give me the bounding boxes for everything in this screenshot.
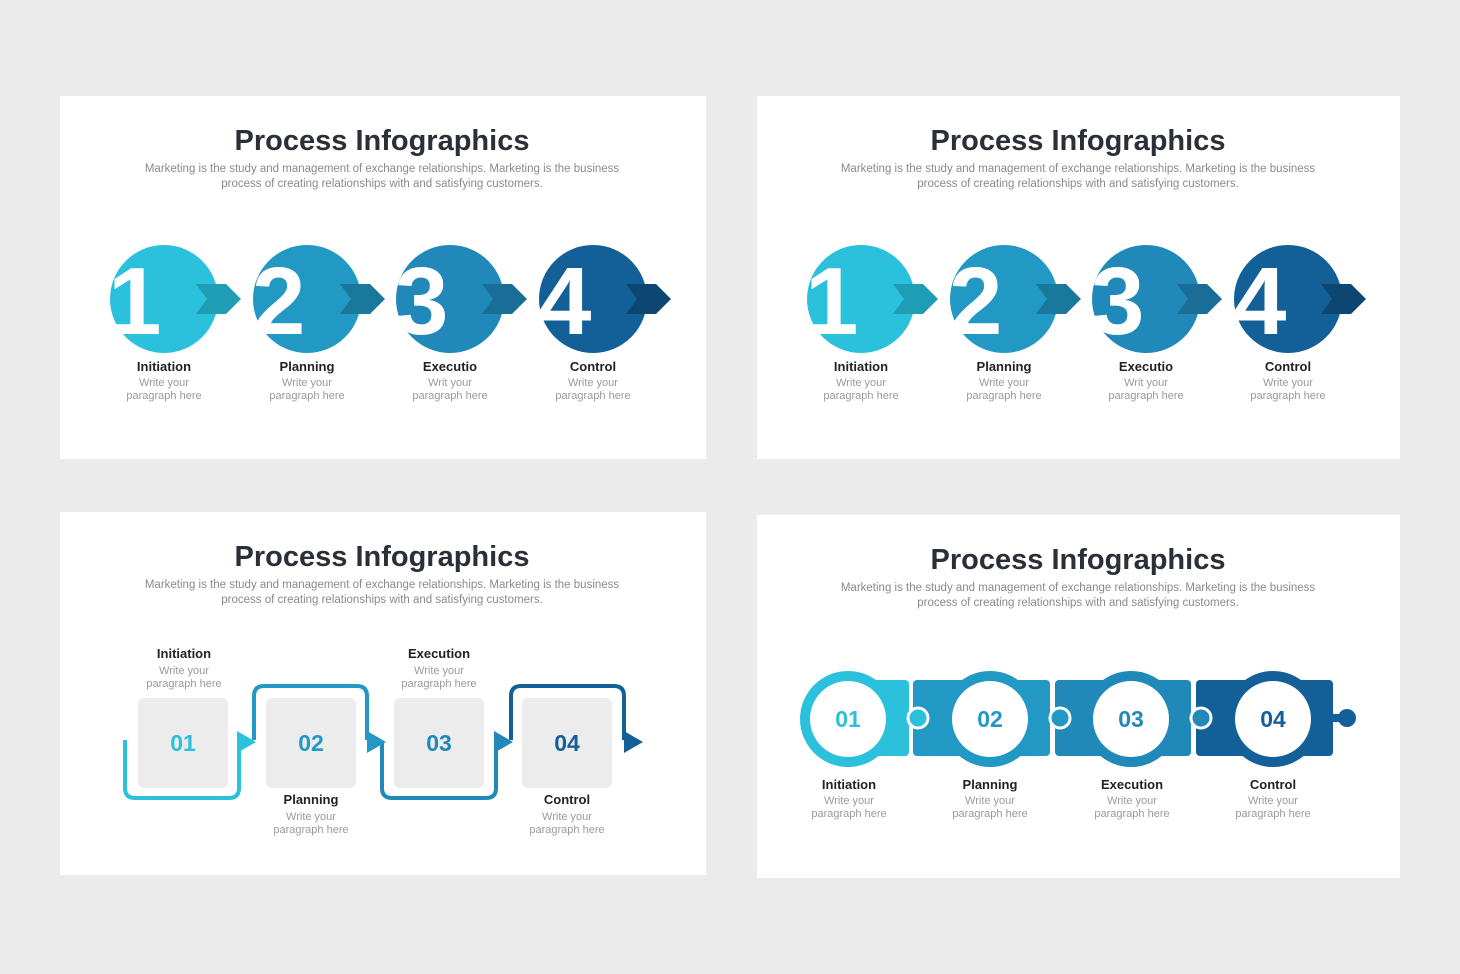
labels: paragraph here — [1094, 808, 1170, 820]
step 1: Initiation — [834, 359, 888, 374]
puzzle pieces — [848, 680, 1356, 756]
labels: Initiation — [157, 646, 211, 661]
step 1: Write your — [836, 377, 886, 389]
step 2 — [949, 245, 1081, 402]
step 3: paragraph here — [1108, 390, 1184, 402]
step 3: 3 — [395, 248, 448, 355]
step 4: Control — [570, 359, 616, 374]
labels: paragraph here — [273, 824, 349, 836]
step 3 — [395, 245, 527, 402]
labels: paragraph here — [811, 808, 887, 820]
arrowheads — [237, 731, 643, 753]
box 04: 04 — [554, 730, 580, 756]
step 2: 2 — [252, 248, 305, 355]
title — [841, 544, 1315, 609]
step 2: paragraph here — [966, 390, 1042, 402]
step 2: 2 — [949, 248, 1002, 355]
step 2: Write your — [979, 377, 1029, 389]
labels — [146, 646, 605, 836]
labels: Write your — [286, 811, 336, 823]
labels: Write your — [824, 795, 874, 807]
labels: Write your — [542, 811, 592, 823]
labels — [811, 777, 1311, 820]
labels: paragraph here — [952, 808, 1028, 820]
box 02: 02 — [298, 730, 324, 756]
step 2: Planning — [280, 359, 335, 374]
box 02 — [266, 698, 356, 788]
title — [145, 541, 619, 606]
labels: Planning — [963, 777, 1018, 792]
step 1: Initiation — [137, 359, 191, 374]
box 04 — [522, 698, 612, 788]
panel: bottom-right puzzle — [757, 515, 1400, 878]
step 4: paragraph here — [555, 390, 631, 402]
box 03 — [394, 698, 484, 788]
labels: Write your — [965, 795, 1015, 807]
labels: paragraph here — [529, 824, 605, 836]
labels: Write your — [159, 665, 209, 677]
labels: Initiation — [822, 777, 876, 792]
step 4: 4 — [538, 248, 591, 355]
step 4: Write your — [1263, 377, 1313, 389]
panel: bottom-left boxes — [60, 512, 706, 875]
labels: Planning — [284, 792, 339, 807]
node 03: 03 — [1118, 706, 1144, 732]
labels: Write your — [1248, 795, 1298, 807]
box 01 — [138, 698, 228, 788]
box 03: 03 — [426, 730, 452, 756]
step 1 — [805, 245, 938, 402]
step 1: paragraph here — [126, 390, 202, 402]
title — [145, 125, 619, 190]
step 2: paragraph here — [269, 390, 345, 402]
labels: Execution — [1101, 777, 1163, 792]
step 4 — [538, 245, 671, 402]
node 01: 01 — [835, 706, 861, 732]
step 4 — [1233, 245, 1366, 402]
step 1: Write your — [139, 377, 189, 389]
step 4: paragraph here — [1250, 390, 1326, 402]
step 1: 1 — [805, 248, 858, 355]
labels: Control — [1250, 777, 1296, 792]
step 3: paragraph here — [412, 390, 488, 402]
panel: top-right circles — [757, 96, 1400, 459]
node 01 — [800, 671, 896, 767]
step 2 — [252, 245, 385, 402]
title — [841, 125, 1315, 190]
labels: Write your — [414, 665, 464, 677]
step 4: 4 — [1233, 248, 1286, 355]
node 02: 02 — [977, 706, 1003, 732]
labels: paragraph here — [1235, 808, 1311, 820]
step 2: Write your — [282, 377, 332, 389]
step 3: Writ your — [1124, 377, 1168, 389]
node 04: 04 — [1260, 706, 1286, 732]
step 1: paragraph here — [823, 390, 899, 402]
node 04 — [1225, 671, 1321, 767]
panel: top-left circles — [60, 96, 706, 459]
step 3 — [1091, 245, 1222, 402]
connector lines — [125, 686, 624, 798]
labels: Write your — [1107, 795, 1157, 807]
step 3: 3 — [1091, 248, 1144, 355]
node 03 — [1083, 671, 1179, 767]
labels: Control — [544, 792, 590, 807]
labels: paragraph here — [146, 678, 222, 690]
step 1 — [108, 245, 241, 402]
node 02 — [942, 671, 1038, 767]
box 01: 01 — [170, 730, 196, 756]
step 4: Write your — [568, 377, 618, 389]
step 4: Control — [1265, 359, 1311, 374]
labels: Execution — [408, 646, 470, 661]
step 1: 1 — [108, 248, 161, 355]
step 3: Executio — [1119, 359, 1173, 374]
step 3: Writ your — [428, 377, 472, 389]
step 2: Planning — [977, 359, 1032, 374]
step 3: Executio — [423, 359, 477, 374]
labels: paragraph here — [401, 678, 477, 690]
